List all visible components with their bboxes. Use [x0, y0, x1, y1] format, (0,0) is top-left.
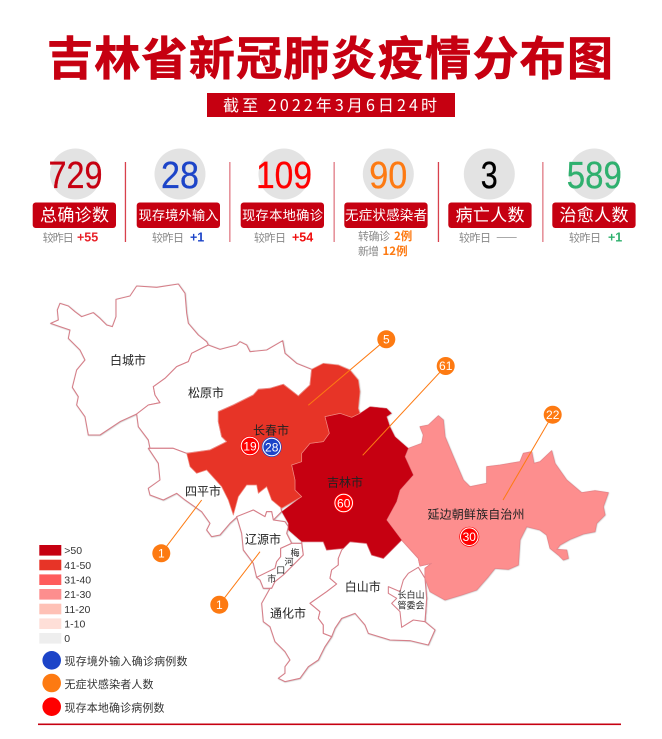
stat: imported	[137, 148, 220, 246]
stat: asymptomatic: 90	[369, 155, 407, 197]
city labels: 河	[284, 555, 294, 568]
city labels: 吉林市	[327, 474, 363, 490]
title: 吉林省新冠肺炎疫情分布图	[47, 23, 613, 89]
stat: recovered	[552, 148, 636, 246]
stat: asymptomatic: 无症状感染者	[345, 204, 427, 224]
stat: total confirmed: 总确诊数	[40, 201, 109, 226]
map of Jilin province	[51, 284, 608, 682]
city labels: 松原市	[188, 384, 224, 401]
region: Meihekou	[257, 543, 303, 588]
city labels: 四平市	[185, 482, 221, 500]
legend: colour scale: 0	[64, 633, 70, 645]
callout: Liaoyuan 1	[210, 552, 260, 614]
stat: imported: 28	[161, 155, 199, 197]
region: Yanbian	[387, 416, 608, 600]
divider	[125, 162, 126, 242]
stat: asymptomatic: 2例	[394, 228, 412, 244]
stat: total confirmed	[33, 148, 116, 246]
stat: deaths	[448, 148, 532, 246]
region: Liaoyuan	[237, 510, 292, 577]
stat: local: 较昨日	[254, 230, 286, 246]
stat: total confirmed: 729	[48, 155, 102, 197]
legend: colour scale: 41-50	[64, 560, 91, 572]
legend: asymptomatic: 无症状感染者人数	[64, 676, 154, 692]
stat: total confirmed: 较昨日	[43, 230, 74, 246]
stat: deaths: 较昨日	[459, 230, 491, 246]
callout: Liaoyuan 1: 1	[216, 598, 223, 612]
city labels: 长春市	[253, 422, 289, 438]
legend: colour scale: 1-10	[64, 618, 85, 630]
region: Tonghua	[262, 542, 343, 682]
stat: total confirmed: +55	[77, 230, 98, 244]
badge: Jilin local 60: 60	[337, 496, 351, 510]
badge: Changchun local 19: 19	[243, 439, 257, 453]
city labels: 梅	[290, 546, 300, 559]
callout: Siping 1	[152, 500, 202, 562]
stat: asymptomatic: 新增	[358, 243, 379, 259]
callout: Changchun 5: 5	[383, 332, 390, 346]
stat: local: 109	[256, 155, 312, 197]
stat: local: 现存本地确诊	[242, 205, 324, 224]
stat: asymptomatic	[344, 148, 428, 259]
city labels: 延边朝鲜族自治州	[428, 506, 524, 522]
stat: deaths: 3	[481, 155, 498, 197]
region: Changchun	[187, 363, 360, 515]
stat: imported: 现存境外输入	[138, 205, 218, 224]
callout: Jilin 61: 61	[439, 359, 453, 373]
stat: local: +54	[292, 230, 313, 244]
city labels: 白城市	[110, 352, 146, 368]
region: Changbai Mountain committee	[388, 567, 427, 627]
case badges	[240, 436, 479, 547]
city labels: 长白山	[397, 588, 425, 601]
badge: Yanbian local 30	[459, 527, 479, 547]
divider	[438, 162, 439, 242]
stat: imported: 较昨日	[152, 230, 184, 246]
region: Jilin city	[282, 407, 413, 558]
legend: colour scale: 11-20	[64, 604, 91, 616]
badge: Jilin local 60	[334, 493, 354, 513]
region: Baicheng	[51, 284, 208, 435]
city labels: 白山市	[345, 578, 381, 595]
city labels	[110, 352, 524, 622]
badge: Yanbian local 30: 30	[463, 530, 476, 544]
stat: local	[241, 148, 324, 246]
stat: recovered: 治愈人数	[560, 201, 628, 226]
stat: deaths: 病亡人数	[456, 201, 524, 226]
legend: asymptomatic	[42, 674, 154, 692]
legend: colour scale: >50	[64, 545, 82, 557]
stat: asymptomatic: 转确诊	[358, 228, 390, 244]
badge: Changchun local 19	[240, 436, 260, 456]
city labels: 管委会	[397, 598, 425, 612]
date banner: 截至 2022年3月6日24时	[223, 92, 437, 116]
legend: colour scale	[39, 545, 91, 645]
callout: Changchun 5	[308, 330, 395, 405]
callout: Yanbian 22: 22	[546, 408, 560, 422]
city labels: 市	[267, 572, 276, 585]
badge: Changchun imported 28	[262, 437, 282, 457]
legend: local cases: 现存本地确诊病例数	[64, 700, 164, 716]
city labels: 通化市	[270, 604, 306, 622]
legend: colour scale: 31-40	[64, 574, 91, 586]
callout: Jilin 61	[363, 357, 455, 455]
panel: statistics row	[33, 148, 636, 259]
divider	[542, 162, 544, 242]
badge: Changchun imported 28: 28	[265, 440, 279, 454]
region: Songyuan	[137, 341, 312, 453]
legend: colour scale: 21-30	[64, 589, 91, 601]
stat: imported: +1	[190, 230, 204, 244]
divider	[334, 162, 335, 242]
asymptomatic callouts	[152, 330, 562, 614]
stat: asymptomatic: 12例	[382, 243, 408, 259]
stat: recovered: 589	[567, 155, 622, 197]
region: Siping	[148, 448, 282, 537]
region: Baishan	[310, 540, 435, 645]
city labels: 辽源市	[245, 530, 281, 548]
legend: imported cases: 现存境外输入确诊病例数	[64, 653, 188, 669]
divider	[229, 162, 230, 242]
stat: recovered: 较昨日	[569, 230, 601, 246]
city labels: 口	[276, 564, 285, 576]
callout: Yanbian 22	[503, 406, 562, 500]
legend	[39, 545, 187, 716]
bottom rule	[38, 724, 621, 725]
stat: recovered: +1	[608, 230, 622, 244]
callout: Siping 1: 1	[158, 546, 165, 560]
